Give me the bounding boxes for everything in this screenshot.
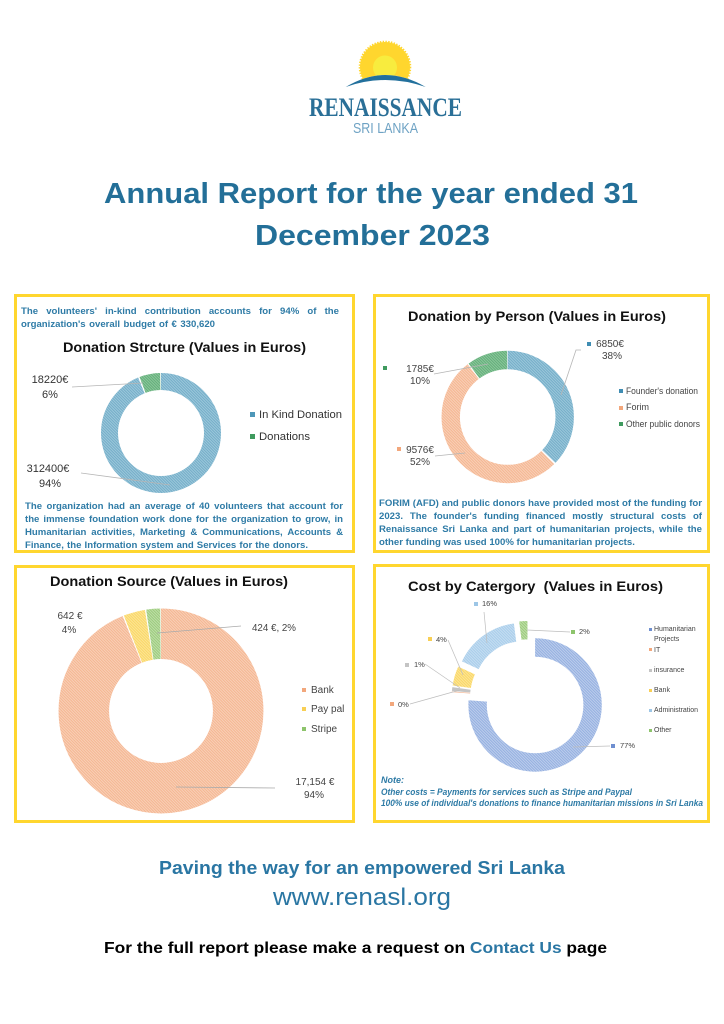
data labels: 1% (414, 660, 425, 669)
data labels: 52% (410, 457, 430, 468)
data labels (57, 611, 335, 801)
title: December 2023 (255, 220, 490, 252)
text block: volunteers note: Humanitarian activities, Marketing & Communications, Accounts & (25, 527, 343, 538)
data labels: 0% (398, 700, 409, 709)
data labels: 6850€ (596, 339, 624, 350)
legend: Administration (654, 707, 698, 714)
text block: FORIM funding (379, 498, 702, 548)
legend (250, 409, 342, 443)
icon: rising sun (338, 42, 432, 100)
legend: Bank (311, 685, 335, 696)
donut ring (84, 634, 238, 788)
text block: volunteers note: the immense foundation work done for the organization to grow, in (25, 514, 343, 525)
chart: cost by category exploded donut (381, 578, 703, 808)
legend: In Kind Donation (259, 409, 342, 421)
legend: IT (654, 647, 661, 654)
data labels: 642 € (57, 611, 83, 622)
legend: Founder's donation (626, 386, 698, 396)
legend (302, 685, 344, 735)
chart heading: Donation Source (Values in Euros) (50, 573, 288, 589)
chart heading: Donation Strcture (Values in Euros) (63, 339, 306, 355)
data labels: 2% (579, 627, 590, 636)
legend: Bank (654, 687, 670, 694)
data labels: 38% (602, 351, 622, 362)
donut slices (461, 630, 593, 762)
legend: Donations (259, 431, 310, 443)
data labels (390, 599, 635, 750)
legend: Pay pal (311, 704, 344, 715)
title (104, 178, 638, 252)
data labels: 6% (42, 389, 58, 401)
chart heading: Donation by Person (Values in Euros) (408, 308, 666, 324)
text block: volunteers contribution (21, 306, 339, 330)
data labels: 1785€ (406, 364, 434, 375)
text block: volunteers contribution: organization's overall budget of € 330,620 (21, 319, 215, 330)
legend: Stripe (311, 724, 338, 735)
data labels: 312400€ (27, 463, 69, 475)
footer: tagline, website and contact (104, 858, 607, 957)
legend: insurance (654, 667, 684, 674)
data labels: 4% (62, 625, 76, 636)
text block: FORIM funding: FORIM (AFD) and public donors have provided most of the funding for (379, 498, 702, 509)
data labels: 10% (410, 376, 430, 387)
panel: cost by category (373, 564, 710, 823)
data labels: 4% (436, 635, 447, 644)
contact line: For the full report please make a request on Contact Us page (104, 940, 607, 957)
legend: Other public donors (626, 419, 700, 429)
title: Annual Report for the year ended 31 (104, 178, 638, 210)
data labels: 94% (39, 478, 61, 490)
tagline: Paving the way for an empowered Sri Lanka (159, 858, 566, 878)
chart: donation source donut (50, 573, 344, 814)
legend: Forim (626, 402, 649, 412)
text block: volunteers note: The organization had an average of 40 volunteers that account for (25, 501, 343, 512)
logo subtitle: SRI LANKA (353, 120, 418, 137)
data labels (27, 374, 170, 490)
donut ring (451, 360, 565, 474)
text block: FORIM funding: 2023. The founder's funding financed mostly structural costs of (379, 511, 702, 522)
legend: Other (654, 727, 672, 734)
text block: FORIM funding: other funding was used 100% for humanitarian projects. (379, 537, 635, 548)
legend (619, 386, 700, 429)
text block: volunteers contribution: The volunteers' in-kind contribution accounts for 94% of the (21, 306, 339, 317)
legend: Humanitarian (654, 626, 696, 633)
panel: donation by person (373, 294, 710, 553)
legend (649, 626, 698, 734)
panel: donation structure (14, 294, 355, 553)
data labels: 94% (304, 790, 324, 801)
data labels: 18220€ (32, 374, 68, 386)
data labels: 77% (620, 741, 635, 750)
data labels: 424 €, 2% (252, 623, 296, 634)
donut ring (110, 382, 212, 484)
legend: Projects (654, 636, 680, 643)
text block: volunteers note (25, 501, 343, 551)
website: www.renasl.org (272, 884, 451, 911)
chart: donation by person donut (383, 308, 700, 484)
text block: note: Other costs = Payments for services such as Stripe and Paypal (381, 787, 632, 797)
data labels: 16% (482, 599, 497, 608)
text block: volunteers note: Finance, the Information system and Services for the donors. (25, 540, 308, 551)
panel: donation source (14, 565, 355, 823)
text block: FORIM funding: Renaissance Sri Lanka and part of humanitarian projects, while the (379, 524, 702, 535)
data labels: 9576€ (406, 445, 434, 456)
data labels: 17,154 € (296, 777, 335, 788)
logo: Renaissance Sri Lanka (309, 40, 462, 137)
text block: note: Note: (381, 775, 404, 785)
text block: note (381, 775, 703, 808)
chart heading: Cost by Catergory (Values in Euros) (408, 578, 663, 594)
chart: donation structure donut (27, 339, 342, 493)
data labels (383, 339, 624, 468)
